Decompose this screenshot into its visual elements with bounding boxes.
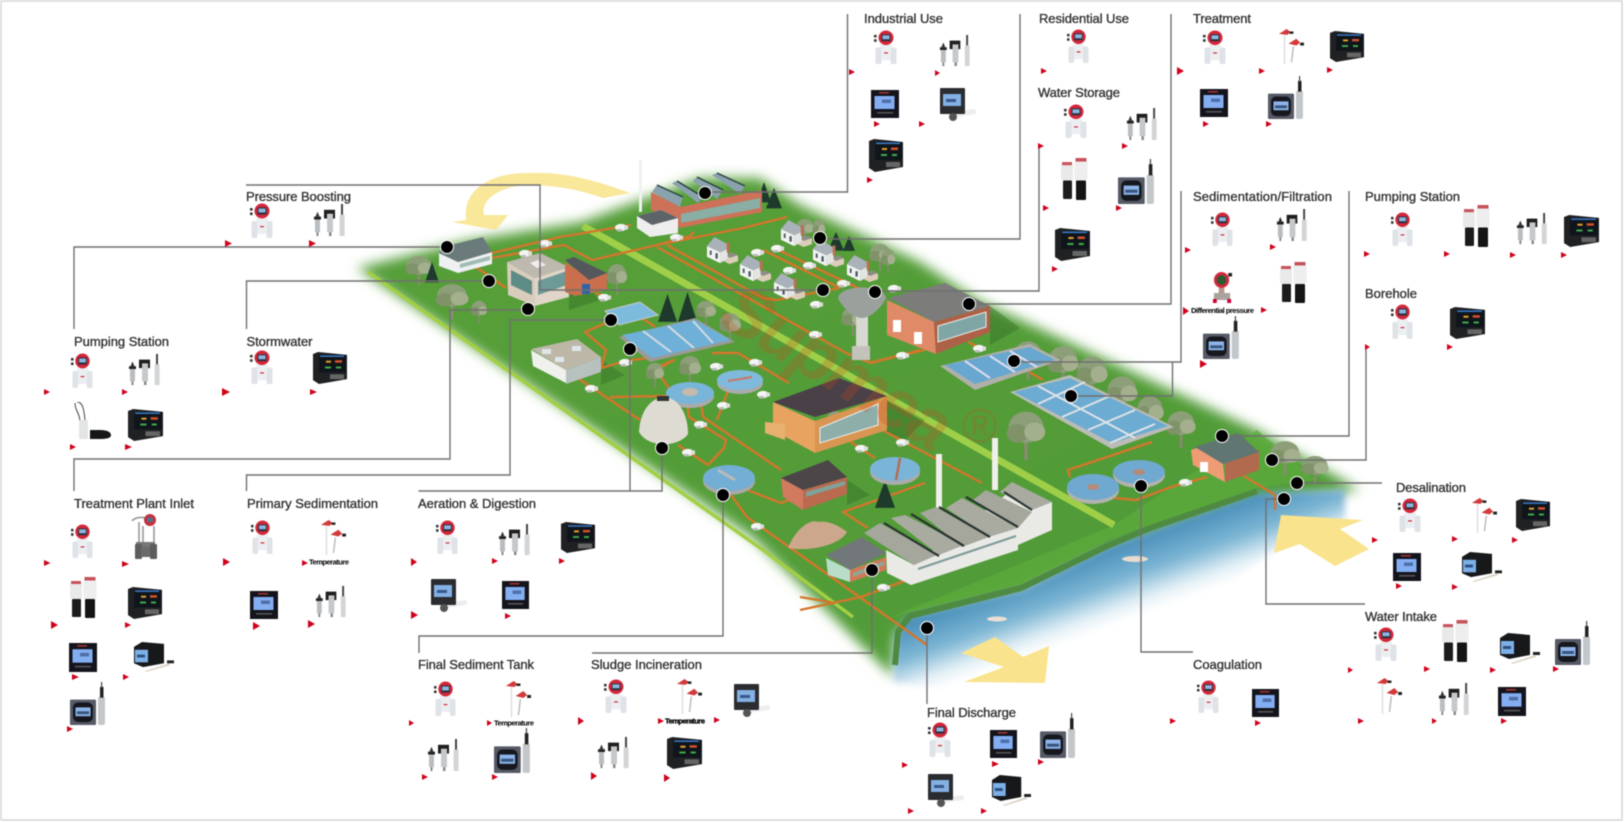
marker xyxy=(1041,68,1047,74)
heading: Sludge Incineration xyxy=(591,657,702,672)
markers xyxy=(1177,67,1333,127)
heading: Coagulation xyxy=(1193,657,1262,672)
markers xyxy=(1372,536,1518,590)
instruments xyxy=(71,354,163,441)
building: intake pump house xyxy=(1191,433,1259,482)
markers xyxy=(223,558,315,630)
instruments xyxy=(431,520,595,612)
instruments xyxy=(1391,304,1485,339)
markers xyxy=(222,388,317,396)
ground: green lawn plate xyxy=(357,178,1360,677)
tank: small basin xyxy=(605,302,658,325)
markers xyxy=(1364,251,1567,258)
instruments xyxy=(1200,29,1364,119)
trees and shrubs xyxy=(405,182,1329,508)
instruments xyxy=(428,681,531,773)
instruments xyxy=(1197,680,1279,717)
panel: Desalination xyxy=(1372,480,1550,590)
markers xyxy=(1170,718,1261,726)
instruments xyxy=(250,520,346,619)
building: brick workshop xyxy=(565,257,607,296)
building: pump house xyxy=(439,237,492,273)
building: digester dome xyxy=(639,396,688,444)
heading: Water Intake xyxy=(1365,609,1437,624)
building: office xyxy=(507,253,569,306)
heading: Sedimentation/Filtration xyxy=(1193,189,1332,204)
orange pipes network xyxy=(476,217,1275,645)
markers xyxy=(409,720,498,780)
markers xyxy=(902,759,1044,814)
instruments xyxy=(598,679,770,769)
heading: Pumping Station xyxy=(74,334,169,349)
building: water tower xyxy=(838,288,886,360)
panel: Residential Use xyxy=(1039,11,1129,74)
houses xyxy=(707,220,878,300)
watermark: Supmea xyxy=(708,268,967,466)
instruments xyxy=(250,204,345,238)
label: Differential pressure: Differential pressure xyxy=(1191,306,1254,315)
heading: Borehole xyxy=(1365,286,1417,301)
heading: Final Sediment Tank xyxy=(418,657,534,672)
heading: Water Storage xyxy=(1038,85,1120,100)
markers xyxy=(1348,666,1559,724)
panel: Stormwater xyxy=(222,334,347,396)
map: water treatment site illustration xyxy=(357,160,1369,690)
arrow: water intake xyxy=(1274,515,1369,566)
round clarifier tanks xyxy=(666,370,1165,504)
heading: Treatment xyxy=(1193,11,1251,26)
markers xyxy=(44,560,131,732)
label: Temperature: Temperature xyxy=(665,716,705,726)
panel: Final Sediment Tank xyxy=(409,657,534,780)
panel: Treatment Plant Inlet xyxy=(44,496,194,732)
river bank xyxy=(895,491,1257,665)
label: Temperature: Temperature xyxy=(494,718,534,728)
markers xyxy=(44,389,132,450)
instruments xyxy=(1374,620,1590,716)
tank: upper filtration beds xyxy=(940,344,1061,390)
instruments xyxy=(69,514,174,725)
tank: four-bay basin xyxy=(619,318,735,362)
building: large brick hall xyxy=(887,283,990,354)
building: sludge incinerator xyxy=(826,537,886,582)
panel: Pressure Boosting xyxy=(225,189,351,247)
instrument xyxy=(1067,29,1089,63)
building: flat roof with skylights xyxy=(531,339,601,384)
panel: Treatment xyxy=(1177,11,1364,127)
instruments xyxy=(250,350,347,384)
arrow: curved recirculation xyxy=(452,173,630,230)
markers xyxy=(411,558,565,619)
heading: Residential Use xyxy=(1039,11,1129,26)
building: small brick hall xyxy=(781,460,847,510)
instruments xyxy=(1391,205,1599,247)
building: orange plant hall xyxy=(765,378,887,453)
label: Temperature: Temperature xyxy=(309,558,349,566)
panel: Water Storage xyxy=(1038,85,1157,272)
instruments xyxy=(1203,209,1307,359)
pipe-mounted flow meters xyxy=(519,224,1192,592)
markers xyxy=(578,717,720,782)
lime path: outer edge xyxy=(368,272,853,617)
heading: Final Discharge xyxy=(927,705,1016,720)
instruments xyxy=(869,30,976,172)
panel: Industrial Use xyxy=(849,11,976,183)
panel: Pumping Station (right) xyxy=(1364,189,1599,258)
heading: Pumping Station xyxy=(1365,189,1460,204)
building: sawtooth factory, top xyxy=(637,160,762,237)
panel: Final Discharge xyxy=(902,705,1075,814)
lawn strip near river xyxy=(884,430,1315,620)
boats on river xyxy=(987,556,1148,622)
river xyxy=(893,490,1345,690)
building: long sawtooth factory xyxy=(864,438,1052,585)
heading: Aeration & Digestion xyxy=(418,496,536,511)
markers xyxy=(1183,244,1276,368)
markers xyxy=(1365,344,1453,350)
sand pile xyxy=(788,521,847,549)
arrow: final discharge xyxy=(961,637,1049,683)
connector lines xyxy=(74,14,1382,704)
panel: Sedimentation/Filtration xyxy=(1183,189,1332,368)
building shadows xyxy=(569,270,1020,505)
heading: Stormwater xyxy=(246,334,313,349)
markers xyxy=(849,69,940,183)
tank: lower filtration beds xyxy=(1010,375,1174,449)
watermark: ® xyxy=(962,400,997,453)
heading: Desalination xyxy=(1396,480,1466,495)
panel: Aeration & Digestion xyxy=(411,496,595,619)
panel: Pumping Station (left) xyxy=(44,334,169,450)
instruments xyxy=(1393,498,1550,582)
heading: Primary Sedimentation xyxy=(247,496,378,511)
panel: Borehole xyxy=(1365,286,1485,350)
heading: Industrial Use xyxy=(864,11,943,26)
heading: Treatment Plant Inlet xyxy=(74,496,194,511)
instruments xyxy=(1055,104,1157,261)
location dots xyxy=(440,186,1304,634)
heading: Pressure Boosting xyxy=(246,189,351,204)
markers xyxy=(225,240,316,247)
instruments xyxy=(928,713,1075,807)
markers xyxy=(1038,143,1128,272)
panel: Primary Sedimentation xyxy=(223,496,378,630)
lime path: central strip xyxy=(583,226,1114,525)
panel: Water Intake xyxy=(1348,609,1590,724)
panel: Coagulation xyxy=(1170,657,1279,726)
panel: Sludge Incineration xyxy=(578,657,770,782)
